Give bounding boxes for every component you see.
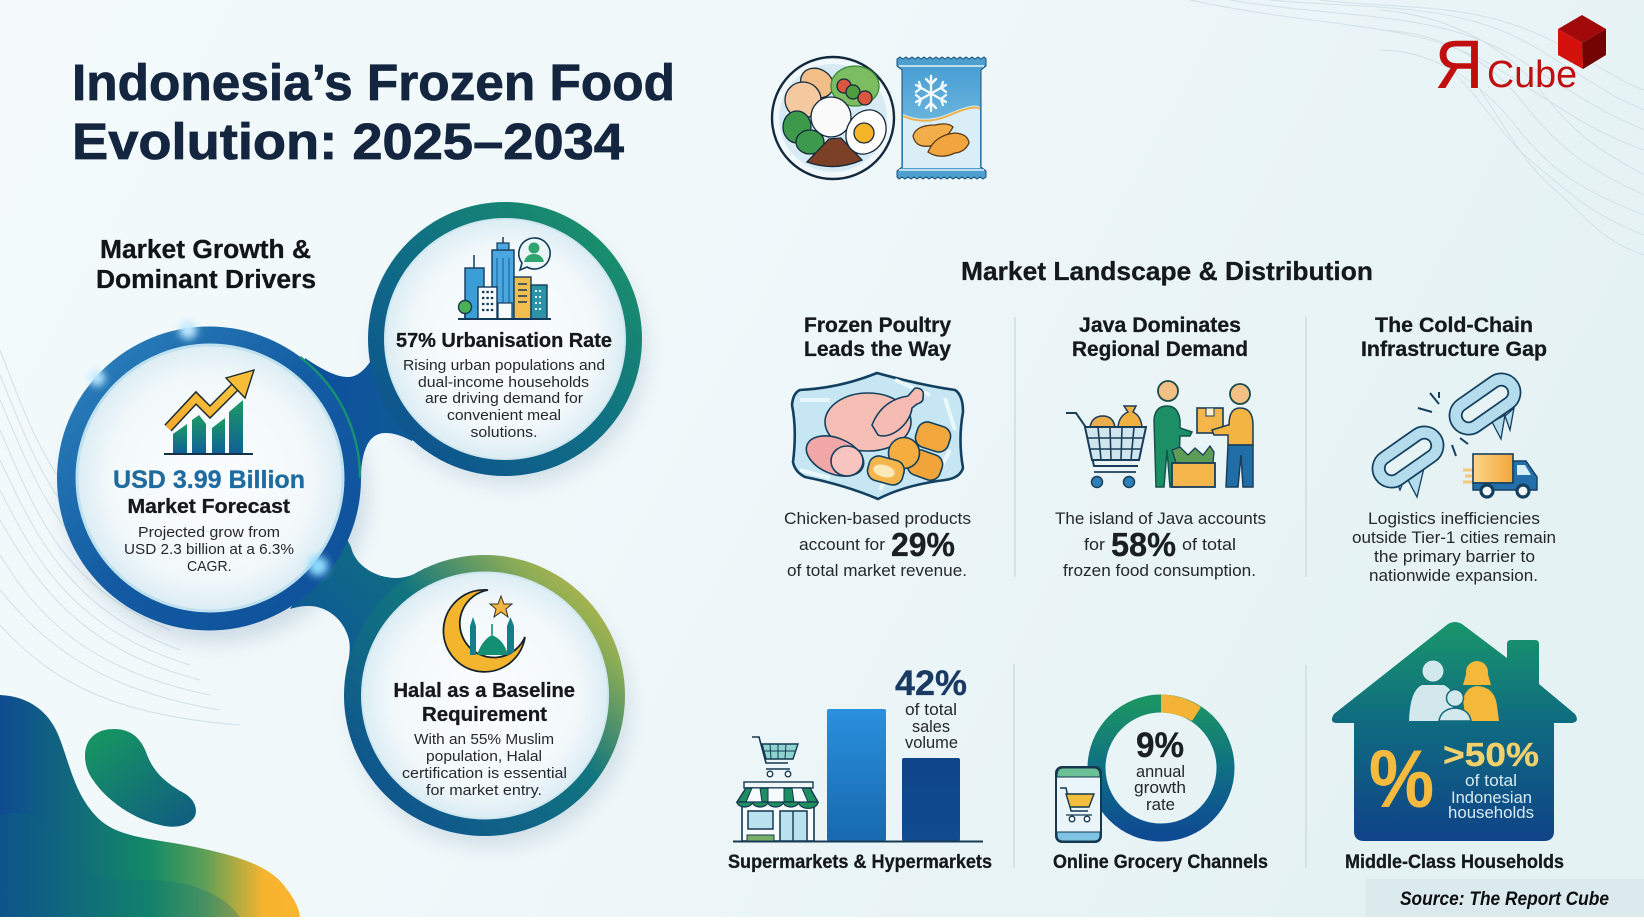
figure: 42 percent: volume: [905, 734, 958, 752]
description: urbanisation: convenient meal: [447, 407, 561, 424]
figure: 9 percent: rate: [1146, 796, 1175, 814]
heading: market growth: Dominant Drivers: [96, 266, 316, 294]
icon: phone with cart: [1056, 767, 1101, 842]
description: java: 58%: [1111, 526, 1176, 563]
panel: urbanisation rate: [368, 202, 642, 476]
title: Indonesia’s Frozen Food: [72, 54, 675, 111]
panel: cold chain: [1352, 314, 1556, 585]
description: poultry: of total market revenue.: [787, 562, 967, 580]
figure: over 50 percent: of total: [1465, 772, 1517, 790]
figure: 42 percent: 42%: [895, 664, 967, 703]
heading: frozen poultry: Frozen Poultry: [804, 314, 951, 337]
heading: market growth: Market Growth &: [100, 236, 311, 264]
description: cold chain: nationwide expansion.: [1369, 567, 1538, 585]
description: urbanisation: solutions.: [470, 424, 538, 441]
figure: USD 3.99 billion: USD 3.99 Billion: [113, 466, 305, 494]
logo: Report Cube: [1435, 15, 1606, 103]
description: java: for: [1084, 536, 1106, 554]
source note: Source: The Report Cube: [1400, 889, 1609, 910]
label: supermarkets: Supermarkets & Hypermarkets: [728, 851, 992, 873]
figure: 9 percent: growth: [1134, 779, 1186, 797]
heading: java: Java Dominates: [1079, 314, 1241, 337]
heading: frozen poultry: [804, 314, 951, 361]
title: Evolution: 2025–2034: [72, 113, 625, 170]
figure: over 50 percent: >50%: [1443, 736, 1539, 773]
figure: 42 percent: sales: [912, 718, 950, 736]
heading: java: [1072, 314, 1248, 361]
figure: over 50 percent: households: [1448, 804, 1534, 822]
label: online grocery: Online Grocery Channels: [1053, 851, 1268, 873]
description: poultry: 29%: [891, 526, 955, 563]
description: halal: [402, 731, 567, 799]
figure: over 50 percent: Indonesian: [1451, 789, 1532, 807]
heading: frozen poultry: Leads the Way: [804, 338, 951, 361]
description: urbanisation: dual-income households: [418, 374, 589, 391]
icon: crescent and mosque: [443, 590, 525, 672]
description: cold chain: Logistics inefficiencies: [1368, 510, 1540, 528]
figure: 42 percent: of total: [905, 701, 957, 719]
description: java: of total: [1182, 536, 1236, 554]
description: java: [1055, 510, 1266, 580]
heading: cold chain: The Cold-Chain: [1375, 314, 1533, 337]
figure: 9 percent: [1134, 726, 1186, 814]
description: poultry: [784, 510, 971, 580]
circle connectors: [63, 219, 645, 846]
description: cold chain: the primary barrier to: [1374, 548, 1535, 566]
heading: java: Regional Demand: [1072, 338, 1248, 361]
bar chart: [733, 709, 983, 842]
icon: percent sign: %: [1369, 734, 1434, 825]
heading: market growth: [96, 236, 316, 294]
heading: halal: [394, 680, 575, 726]
icon: store with cart: [737, 737, 818, 841]
heading: 57% urbanisation rate: 57% Urbanisation Rate: [396, 330, 612, 352]
figure: 9 percent: 9%: [1136, 726, 1184, 765]
icon: city skyline: [458, 237, 551, 319]
panel: market forecast: [57, 321, 361, 630]
label: middle-class households: Middle-Class Households: [1345, 851, 1564, 873]
title: [72, 54, 675, 170]
icon: family: [1409, 660, 1499, 721]
heading: halal: Halal as a Baseline: [394, 680, 575, 702]
description: urbanisation: are driving demand for: [425, 390, 583, 407]
heading: cold chain: [1361, 314, 1547, 361]
icon: broken frozen chain: [1374, 374, 1519, 497]
donut chart: [1096, 694, 1226, 832]
description: urbanisation: Rising urban populations and: [403, 357, 605, 374]
icon: frozen chicken in ice: [792, 373, 963, 499]
panel: online grocery: [1053, 694, 1268, 873]
description: halal: for market entry.: [426, 782, 542, 799]
heading: halal: Requirement: [422, 704, 547, 726]
description: cold chain: outside Tier-1 cities remain: [1352, 529, 1556, 547]
description: forecast: Projected grow from: [138, 524, 280, 541]
description: forecast: USD 2.3 billion at a 6.3%: [124, 541, 294, 558]
figure: 9 percent: annual: [1136, 763, 1185, 781]
panel: middle-class households: [1332, 622, 1577, 873]
icon: cart and shoppers: [1066, 381, 1253, 488]
description: halal: With an 55% Muslim: [414, 731, 554, 748]
panel: frozen poultry: [784, 314, 971, 580]
description: poultry: account for: [799, 536, 886, 554]
icon: plate of food: [772, 57, 894, 179]
description: forecast: CAGR.: [187, 558, 232, 575]
description: halal: population, Halal: [426, 748, 542, 765]
panel: java demand: [1055, 314, 1266, 580]
icon: delivery truck: [1463, 454, 1537, 497]
logo: Report Cube: Я: [1435, 27, 1483, 103]
description: cold chain: [1352, 510, 1556, 585]
panel: supermarkets and hypermarkets: [728, 664, 992, 873]
source note: [1366, 879, 1644, 917]
description: forecast: [124, 524, 294, 575]
description: urbanisation: [403, 357, 605, 441]
decorative blobs: [0, 695, 300, 917]
heading: cold chain: Infrastructure Gap: [1361, 338, 1547, 361]
logo: Report Cube: Cube: [1487, 54, 1577, 96]
figure: 42 percent: [895, 664, 967, 752]
icon: growth chart: [164, 370, 254, 454]
description: java: frozen food consumption.: [1063, 562, 1256, 580]
icon: frozen food bag: [897, 57, 986, 179]
description: java: The island of Java accounts: [1055, 510, 1266, 528]
heading: market forecast: Market Forecast: [128, 496, 290, 518]
description: poultry: Chicken-based products: [784, 510, 971, 528]
figure: over 50 percent: [1443, 736, 1539, 822]
description: halal: certification is essential: [402, 765, 567, 782]
heading: market landscape: Market Landscape & Distribution: [961, 256, 1373, 286]
panel: halal requirement: [344, 555, 625, 836]
icon: house: [1332, 622, 1577, 841]
